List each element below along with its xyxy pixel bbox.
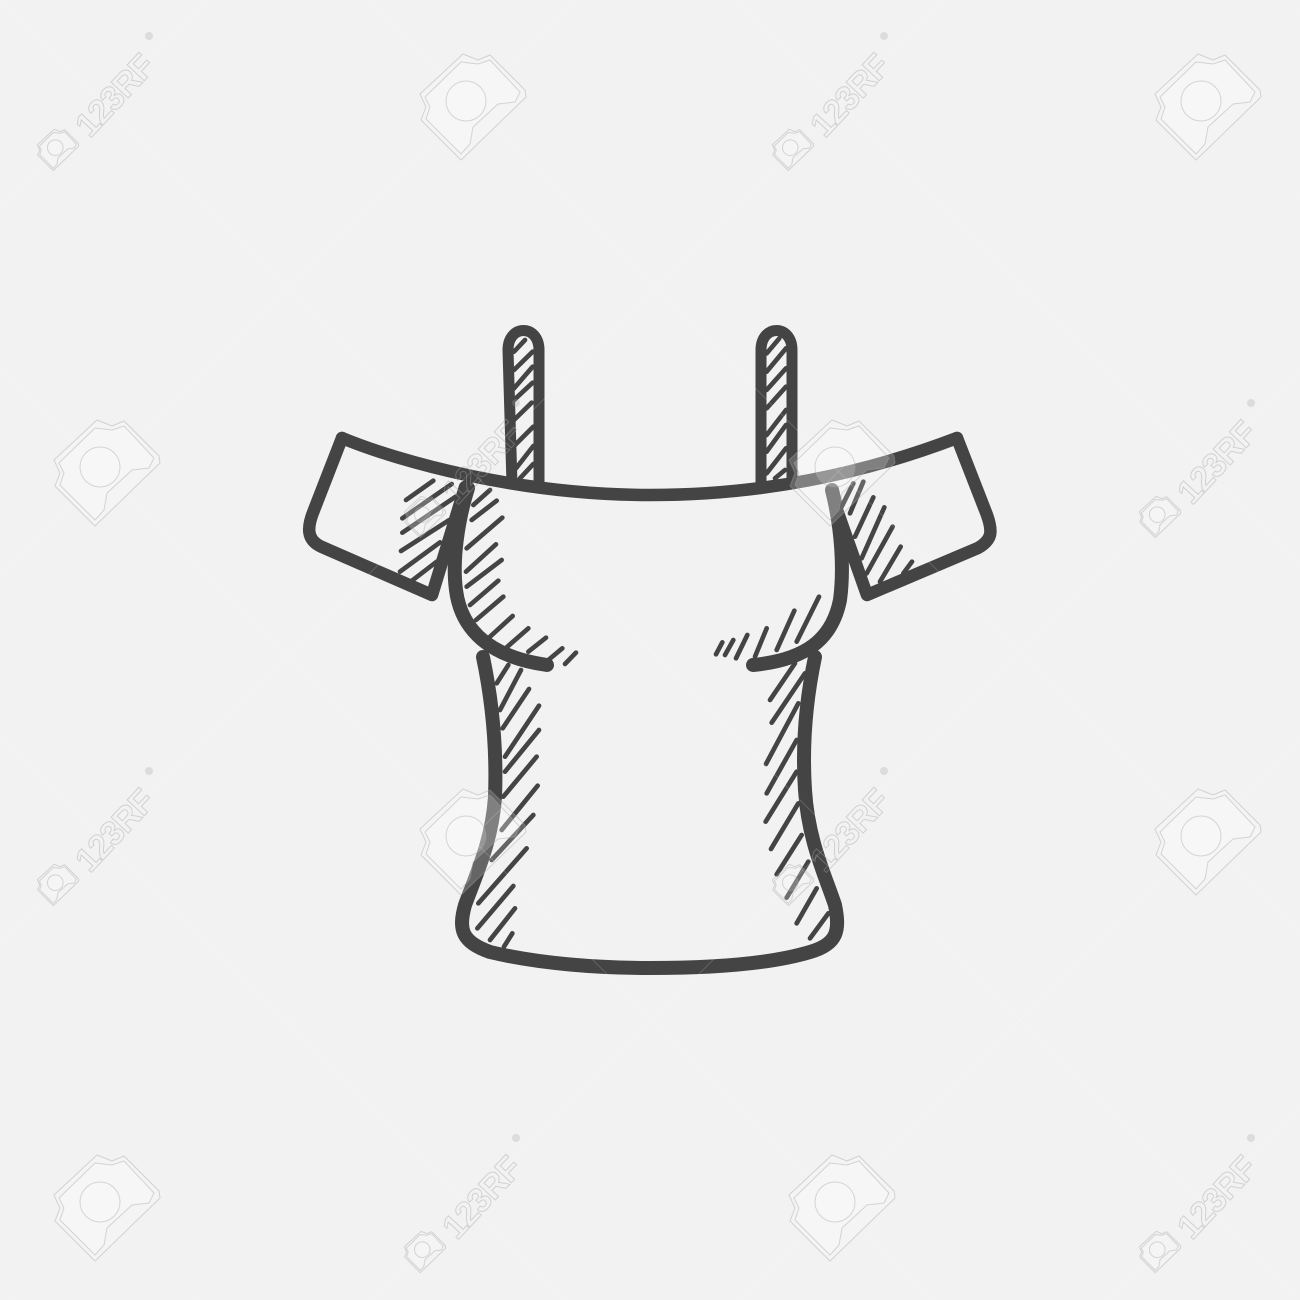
- right strap: [761, 330, 792, 484]
- hatching: right strap, sleeve and bust: [716, 338, 912, 658]
- watermark: logo row 4 right: [1139, 1134, 1264, 1273]
- watermark: egg row 3 left: [420, 789, 526, 895]
- hatching: lower body: [477, 663, 828, 947]
- watermark: egg row 4 left: [54, 1155, 160, 1261]
- left strap: [508, 330, 539, 484]
- watermark: logo row 1 right: 123RF: [803, 47, 897, 144]
- watermark: logo row 4 left: 123RF: [435, 1149, 529, 1246]
- left bust curve: [455, 488, 547, 665]
- watermark: logo row 3 left: 123RF: [68, 782, 162, 879]
- watermark: logo row 4 left: [404, 1134, 529, 1273]
- watermark: egg row 4 right: [789, 1155, 895, 1261]
- watermark: egg row 1 right: [1155, 54, 1261, 160]
- watermark: logo row 4 right: 123RF: [1170, 1149, 1264, 1246]
- watermark: egg row 3 right: [1155, 789, 1261, 895]
- watermark: logo row 2 right: 123RF: [1170, 414, 1264, 511]
- watermark: logo row 3 right: 123RF: [803, 782, 897, 879]
- watermark: logo row 1 right: [772, 32, 897, 171]
- watermark: egg row 2 left: [54, 420, 160, 526]
- neckline band: [342, 438, 957, 495]
- watermark: logo row 1 left: [37, 32, 162, 171]
- watermark: logo row 2 right: [1139, 399, 1264, 538]
- watermark: logo row 2 left: 123RF: [435, 414, 529, 511]
- hatching: left strap, sleeve and bust: [400, 340, 576, 664]
- body outline: [462, 657, 837, 968]
- watermark: logo row 3 right: [772, 767, 897, 906]
- watermark: egg row 2 right: [789, 420, 895, 526]
- watermark: logo row 2 left: [404, 399, 529, 538]
- watermark: egg row 1: [420, 54, 526, 160]
- watermark: logo row 3 left: [37, 767, 162, 906]
- watermark: logo row 1 left: 123RF: [68, 47, 162, 144]
- left sleeve: [309, 438, 465, 595]
- right sleeve: [837, 438, 990, 595]
- right bust curve: [753, 490, 842, 665]
